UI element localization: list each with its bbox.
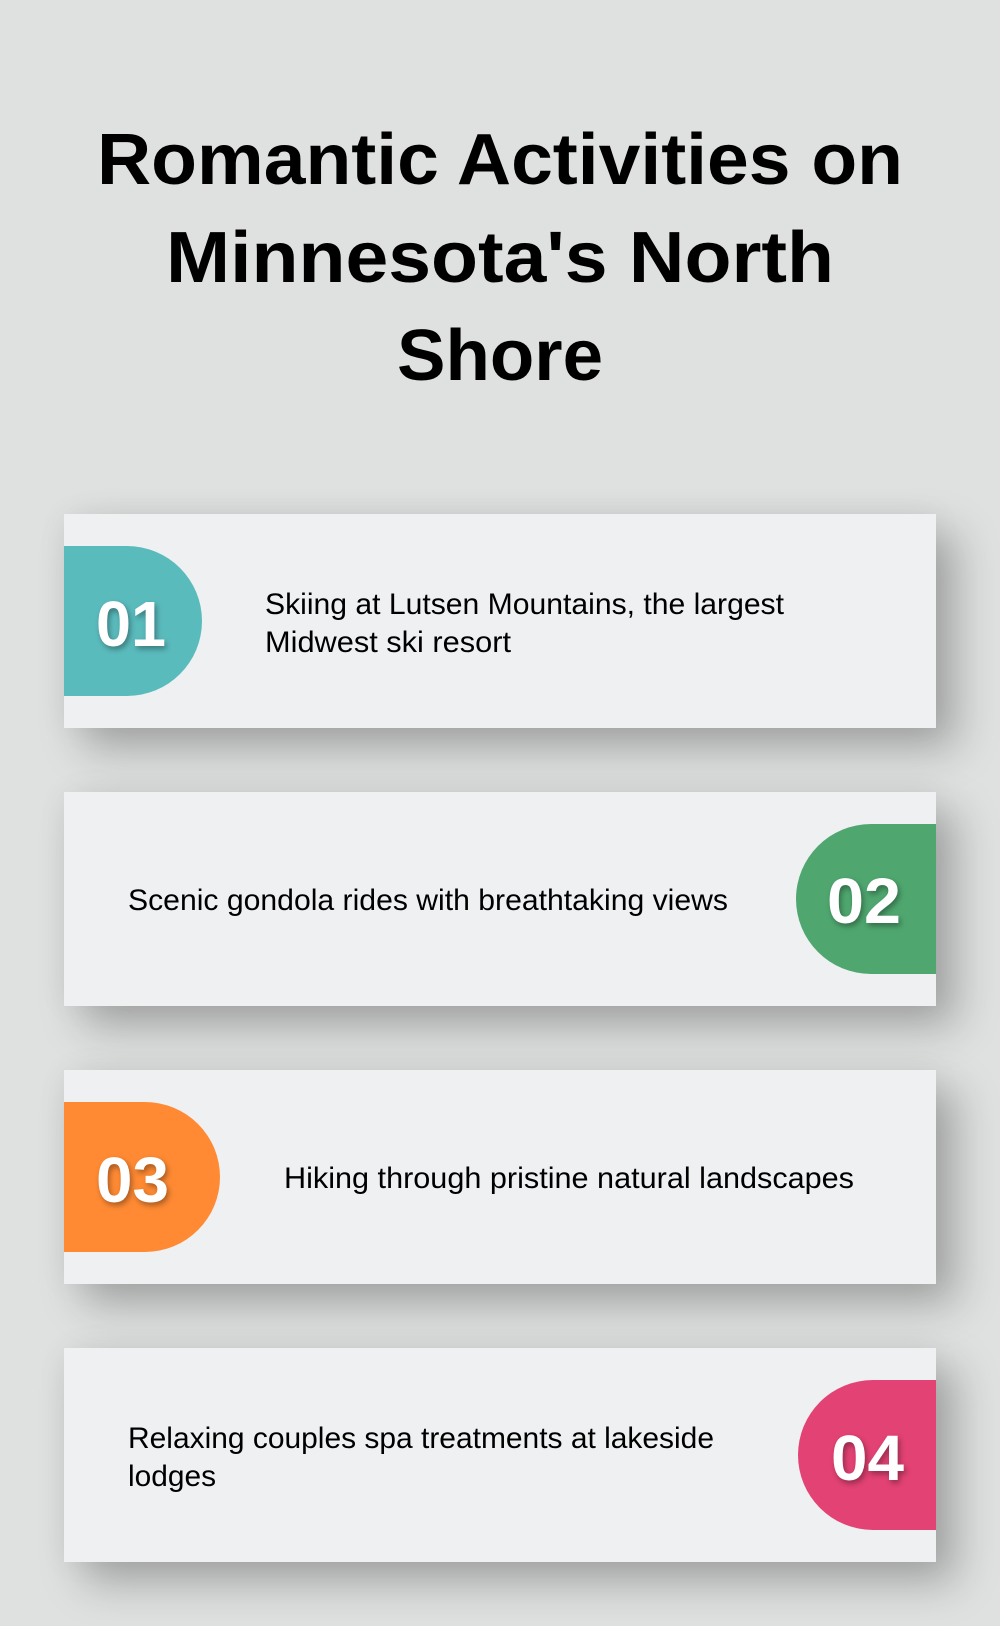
text: item 04 description: Relaxing couples spa treatments at lakeside — [128, 1422, 714, 1455]
panel: item 02 — [64, 792, 936, 1006]
badge: 02 — [796, 824, 936, 974]
badge: 04 — [798, 1380, 936, 1530]
title: Shore — [397, 316, 603, 396]
badge: 01: 01 — [96, 588, 166, 660]
panel: item 04 — [64, 1348, 936, 1562]
title — [97, 120, 903, 396]
title: Minnesota's North — [166, 218, 834, 298]
badge: 04: 04 — [831, 1422, 904, 1494]
text: item 01 description: Skiing at Lutsen Mountains, the largest — [265, 588, 785, 621]
text: item 01 description — [265, 588, 785, 659]
text: item 01 description: Midwest ski resort — [265, 626, 512, 659]
badge: 01 — [64, 546, 202, 696]
panel: item 01 — [64, 514, 936, 728]
text: item 02 description: Scenic gondola rides with breathtaking views — [128, 884, 728, 917]
panel: item 03 — [64, 1070, 936, 1284]
badge: 03 — [64, 1102, 220, 1252]
badge: 03: 03 — [96, 1144, 169, 1216]
text: item 04 description: lodges — [128, 1460, 216, 1493]
text: item 03 description: Hiking through pristine natural landscapes — [284, 1162, 854, 1195]
badge: 02: 02 — [827, 865, 901, 937]
text: item 04 description — [128, 1422, 714, 1493]
title: Romantic Activities on — [97, 120, 903, 200]
